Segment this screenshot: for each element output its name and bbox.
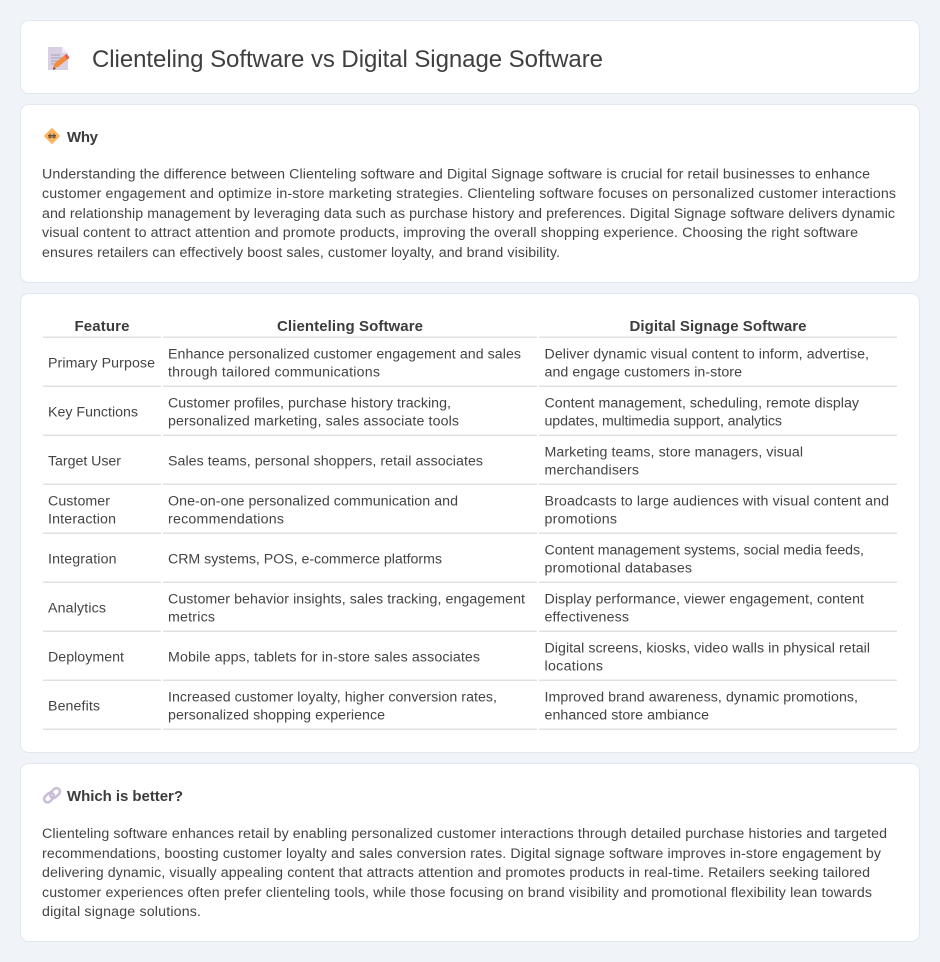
table header	[43, 318, 897, 338]
row: key functions	[43, 396, 897, 436]
row: benefits	[43, 690, 897, 730]
text block: why	[42, 166, 896, 261]
table header: Digital Signage Software	[630, 318, 806, 335]
row: target user: Target User	[48, 454, 121, 470]
row: deployment: Deployment	[48, 650, 124, 666]
icon: warning diamond	[44, 128, 60, 144]
row: key functions: Content management, scheduling, remote display	[544, 396, 860, 412]
row: analytics	[43, 592, 897, 632]
row: benefits: Benefits	[48, 698, 100, 714]
text block: why: Understanding the difference between Clienteling software and Digital Signage software is crucial for retail businesses to enhance	[42, 166, 870, 182]
table header: Clienteling Software	[277, 318, 423, 335]
row: integration	[43, 542, 897, 583]
row: benefits: enhanced store ambiance	[544, 708, 709, 724]
row: customer interaction: Interaction	[48, 512, 116, 528]
heading: why: Why	[67, 129, 99, 146]
row: target user	[43, 444, 897, 485]
text block: why: customer engagement and optimize in-store marketing strategies. Clienteling software focuses on personalized customer interactions	[42, 186, 896, 202]
text block: which is better: digital signage solutions.	[42, 904, 201, 920]
row: customer interaction: Broadcasts to large audiences with visual content and	[544, 494, 889, 510]
row: deployment: Mobile apps, tablets for in-store sales associates	[168, 650, 480, 666]
icon: link	[43, 787, 61, 804]
row: benefits: Increased customer loyalty, higher conversion rates,	[168, 690, 497, 706]
text block: which is better: recommendations, boosting customer loyalty and sales conversion rates. Digital signage software improves in-store engagement by	[42, 846, 882, 862]
row: deployment: locations	[544, 658, 603, 674]
panel: comparison table	[20, 294, 920, 752]
text block: which is better: customer experiences often prefer clienteling tools, while those focusing on brand visibility and promotional flexibility lean towards	[42, 885, 872, 901]
row: integration: Integration	[48, 552, 116, 568]
icon: document with pencil	[48, 47, 70, 70]
heading: which is better: Which is better?	[67, 788, 183, 805]
row: analytics: Analytics	[48, 600, 106, 616]
row: analytics: Display performance, viewer engagement, content	[544, 592, 864, 608]
row: key functions: Customer profiles, purchase history tracking,	[168, 396, 451, 412]
row: primary purpose: Enhance personalized customer engagement and sales	[168, 346, 521, 362]
row: integration: CRM systems, POS, e-commerce platforms	[168, 552, 442, 568]
row: customer interaction: recommendations	[168, 512, 284, 528]
text block: why: visual content to attract attention and promote products, improving the overall shopping experience. Choosing the right software	[42, 225, 858, 241]
row: primary purpose: through tailored communications	[168, 364, 380, 380]
heading: title: Clienteling Software vs Digital Signage Software	[92, 46, 603, 73]
row: key functions: updates, multimedia support, analytics	[544, 414, 782, 430]
row: integration: promotional databases	[544, 560, 692, 576]
row: analytics: Customer behavior insights, sales tracking, engagement	[168, 592, 525, 608]
row: benefits: Improved brand awareness, dynamic promotions,	[544, 690, 858, 706]
row: benefits: personalized shopping experience	[168, 708, 385, 724]
row: key functions: personalized marketing, sales associate tools	[168, 414, 459, 430]
row: primary purpose	[43, 346, 897, 387]
table header: Feature	[74, 318, 130, 335]
text block: which is better: delivering dynamic, visually appealing content that attracts attention and promotes products in real-time. Retailers seeking tailored	[42, 865, 870, 881]
row: customer interaction: Customer	[48, 494, 110, 510]
row: analytics: metrics	[168, 610, 215, 626]
row: primary purpose: Primary Purpose	[48, 356, 155, 372]
row: deployment: Digital screens, kiosks, video walls in physical retail	[544, 640, 870, 656]
row: target user: Sales teams, personal shoppers, retail associates	[168, 454, 483, 470]
row: integration: Content management systems, social media feeds,	[544, 542, 864, 558]
text block: why: ensures retailers can effectively boost sales, customer loyalty, and brand visibility.	[42, 245, 560, 261]
row: customer interaction: One-on-one personalized communication and	[168, 494, 458, 510]
row: primary purpose: Deliver dynamic visual content to inform, advertise,	[544, 346, 869, 362]
text block: which is better	[42, 826, 887, 920]
panel: which is better	[20, 764, 920, 942]
row: deployment	[43, 640, 897, 681]
text block: which is better: Clienteling software enhances retail by enabling personalized customer interactions through detailed purchase histories and targeted	[42, 826, 887, 842]
row: primary purpose: and engage customers in-store	[544, 364, 742, 380]
panel: why	[20, 104, 920, 282]
text block: why: and relationship management by leveraging data such as purchase history and preferences. Digital Signage software delivers dynamic	[42, 206, 895, 222]
row: analytics: effectiveness	[544, 610, 629, 626]
panel: title	[20, 20, 920, 94]
row: customer interaction: promotions	[544, 512, 617, 528]
row: target user: Marketing teams, store managers, visual	[544, 444, 803, 460]
row: target user: merchandisers	[544, 462, 639, 478]
row: customer interaction	[43, 494, 897, 534]
row: key functions: Key Functions	[48, 404, 138, 420]
